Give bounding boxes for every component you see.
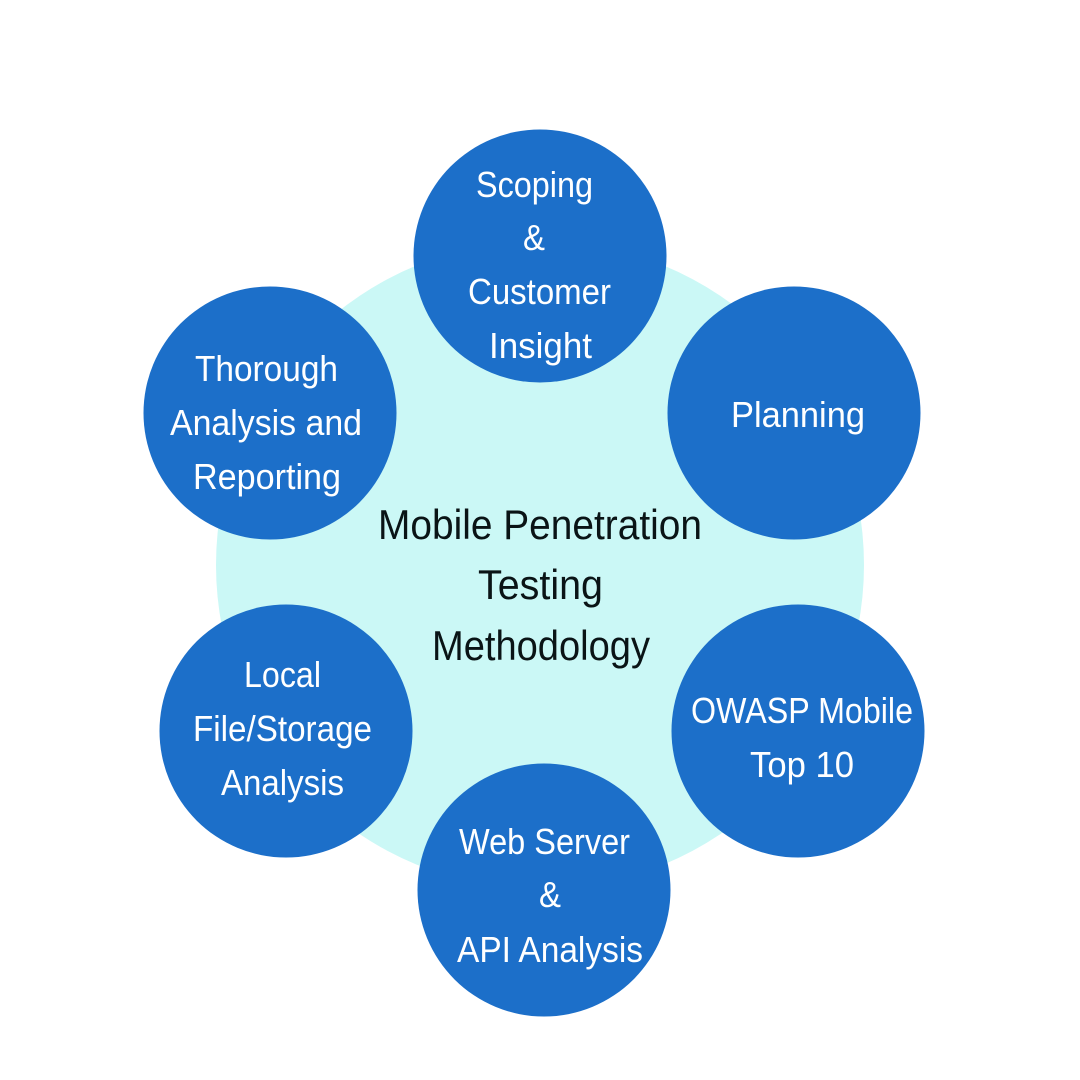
title: Mobile Penetration Testing Methodology <box>378 501 702 669</box>
step: Local File/Storage Analysis: Local <box>244 654 321 695</box>
step: Scoping & Customer Insight: Scoping <box>476 164 593 205</box>
step: Web Server & API Analysis: Web Server <box>459 821 630 862</box>
step: Planning <box>668 286 920 540</box>
step: Thorough Analysis and Reporting: Thorough <box>195 348 338 389</box>
step: Local File/Storage Analysis: File/Storage <box>193 708 372 749</box>
step: OWASP Mobile Top 10 <box>672 604 924 858</box>
step: Scoping & Customer Insight <box>414 130 666 382</box>
title: Mobile Penetration Testing Methodology: Mobile Penetration <box>378 501 702 548</box>
step: Thorough Analysis and Reporting <box>144 286 396 540</box>
step: Web Server & API Analysis: API Analysis <box>457 929 643 970</box>
step: Web Server & API Analysis <box>418 764 670 1016</box>
step: Scoping & Customer Insight: & <box>523 217 545 258</box>
step: Scoping & Customer Insight: Insight <box>489 325 592 366</box>
step: OWASP Mobile Top 10: Top 10 <box>750 744 854 785</box>
step: Planning: Planning <box>731 394 865 435</box>
step: Local File/Storage Analysis: Analysis <box>221 762 344 803</box>
title: Mobile Penetration Testing Methodology: Testing <box>478 561 603 608</box>
step: Scoping & Customer Insight: Customer <box>468 271 611 312</box>
step: Thorough Analysis and Reporting: Analysis and <box>170 402 362 443</box>
step: Thorough Analysis and Reporting: Reporting <box>193 456 341 497</box>
central background circle <box>216 241 864 889</box>
step: OWASP Mobile Top 10: OWASP Mobile <box>691 690 913 731</box>
title: Mobile Penetration Testing Methodology: Methodology <box>432 622 650 669</box>
step: Local File/Storage Analysis <box>160 604 412 858</box>
step: Web Server & API Analysis: & <box>539 874 561 915</box>
